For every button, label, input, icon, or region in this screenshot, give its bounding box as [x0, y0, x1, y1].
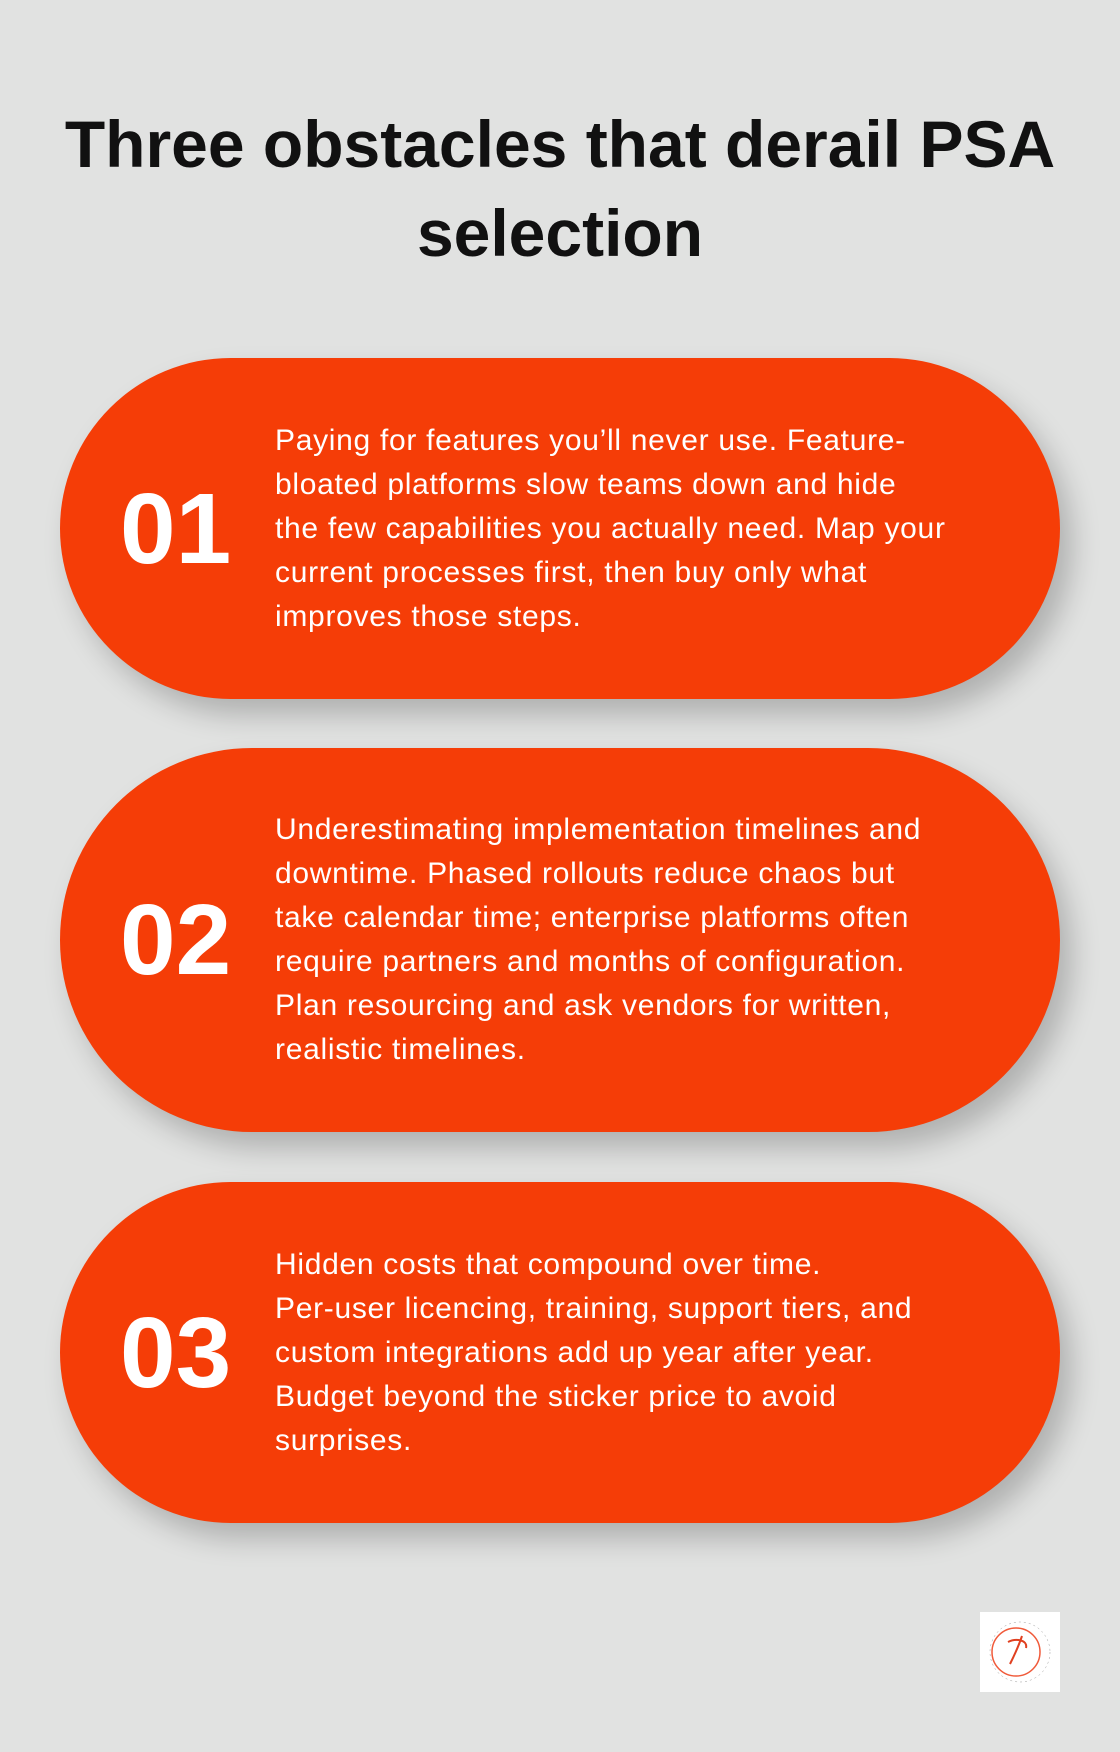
text 01: the few capabilities you actually need. Map your — [275, 512, 946, 544]
panel: obstacle 01 — [60, 358, 1060, 699]
panel: obstacle 03 — [60, 1182, 1060, 1523]
text 03: Hidden costs that compound over time. — [275, 1248, 821, 1280]
text 02: Underestimating implementation timelines and — [275, 813, 921, 846]
text 01 — [275, 424, 946, 632]
title: selection — [417, 196, 703, 270]
text 03: Budget beyond the sticker price to avoid — [275, 1380, 837, 1412]
text 02: require partners and months of configuration. — [275, 945, 905, 978]
text 01: bloated platforms slow teams down and hide — [275, 468, 896, 500]
text 01: Paying for features you’ll never use. Feature- — [275, 424, 906, 456]
text 03: Per-user licencing, training, support tiers, and — [275, 1292, 912, 1324]
text 01: current processes first, then buy only what — [275, 556, 867, 588]
title — [65, 107, 1055, 270]
icon: logo — [980, 1612, 1060, 1692]
text 02: realistic timelines. — [275, 1033, 526, 1066]
text 02: downtime. Phased rollouts reduce chaos but — [275, 857, 895, 890]
text 03 — [275, 1248, 912, 1456]
number 02: 02 — [120, 884, 231, 996]
number 01: 01 — [120, 472, 231, 584]
panel: obstacle 02 — [60, 748, 1060, 1132]
text 02: take calendar time; enterprise platforms often — [275, 901, 909, 934]
title: Three obstacles that derail PSA — [65, 107, 1055, 181]
text 03: surprises. — [275, 1424, 412, 1456]
text 03: custom integrations add up year after year. — [275, 1336, 874, 1368]
text 02 — [275, 813, 921, 1066]
number 03: 03 — [120, 1296, 231, 1408]
text 01: improves those steps. — [275, 600, 582, 632]
text 02: Plan resourcing and ask vendors for written, — [275, 989, 891, 1022]
